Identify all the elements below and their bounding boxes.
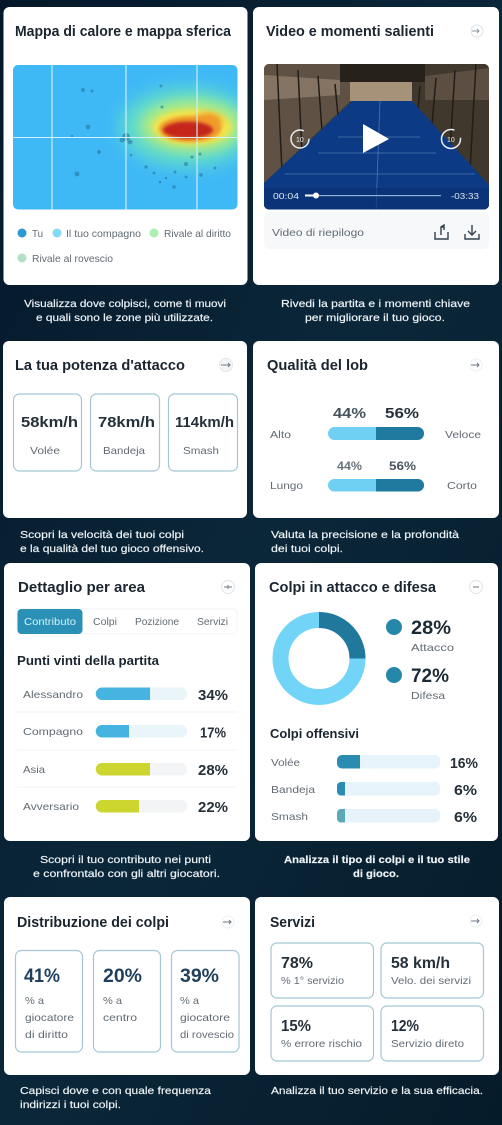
tabs: Servizi xyxy=(197,616,228,628)
heading: serves: Servizi xyxy=(270,914,315,931)
stat: backhand player: giocatore xyxy=(180,1012,230,1024)
stat: forehand player: % a xyxy=(25,995,44,1007)
caption: video: Rivedi la partita e i momenti chiave xyxy=(281,298,470,310)
stat: serve speed: 58 km/h xyxy=(391,955,450,972)
stat: backhand player: 39% xyxy=(180,966,219,987)
caption: serves: Analizza il tuo servizio e la sua efficacia. xyxy=(271,1085,483,1097)
row: bandeja xyxy=(271,782,477,799)
icon: attack arrow xyxy=(220,358,232,372)
panel: serves xyxy=(255,897,499,1075)
bar: alto / veloce: Veloce xyxy=(445,429,481,441)
stat: smash xyxy=(168,394,238,471)
caption: heat map: Visualizza dove colpisci, come ti muovi xyxy=(24,298,226,310)
heading: shot distribution: Distribuzione dei colpi xyxy=(17,914,169,931)
caption: area detail xyxy=(33,854,220,880)
stat: forehand player: giocatore xyxy=(25,1012,74,1024)
stat: serve speed: Velo. dei servizi xyxy=(391,975,471,987)
stat: risk error: 15% xyxy=(281,1018,311,1035)
legend: attack: 28% xyxy=(411,618,451,639)
stat: volée: Volée xyxy=(30,445,60,457)
caption: lob quality xyxy=(271,529,459,555)
heading: area detail: Dettaglio per area xyxy=(18,579,146,596)
icon: serves arrow xyxy=(470,915,482,927)
stat: serve speed xyxy=(381,943,484,998)
stat: backhand player xyxy=(172,950,239,1052)
caption: attack power xyxy=(20,529,204,555)
panel: heat map xyxy=(4,7,256,285)
row: volée xyxy=(271,755,478,772)
stat: direct serve xyxy=(381,1006,484,1061)
bar: lungo / corto: 44% xyxy=(337,459,362,473)
icon: forward xyxy=(442,130,460,148)
stat: first serve: 78% xyxy=(281,955,313,972)
caption: attack and defence: Analizza il tipo di colpi e il tuo stile xyxy=(284,854,470,866)
subheading: offensive shots: Colpi offensivi xyxy=(270,726,359,741)
stat: centre: % a xyxy=(103,995,122,1007)
legend: defence: Difesa xyxy=(411,690,445,702)
legend: defence: 72% xyxy=(411,666,449,687)
row: Alessandro: Alessandro xyxy=(23,689,83,701)
icon: play xyxy=(363,124,389,153)
stat: bandeja: Bandeja xyxy=(103,445,145,457)
legend: defence xyxy=(386,666,449,702)
row: bandeja: 6% xyxy=(454,782,477,799)
tabs xyxy=(17,609,237,634)
row: Avversario: Avversario xyxy=(23,801,79,813)
icon: attack defence arrow xyxy=(470,580,482,594)
heading: heat map: Mappa di calore e mappa sferica xyxy=(15,23,232,40)
caption: shot distribution xyxy=(20,1085,211,1111)
caption: attack power: e la qualità del tuo gioco offensivo. xyxy=(20,543,204,555)
row: Asia: Asia xyxy=(23,764,45,776)
stat: forehand player: 41% xyxy=(24,966,60,987)
tabs: Colpi xyxy=(93,616,117,628)
legend: heat map: Tu xyxy=(32,228,43,240)
icon: video arrow xyxy=(471,25,483,37)
legend: heat map xyxy=(18,228,231,265)
video player xyxy=(264,64,489,210)
caption: heat map: e quali sono le zone più utilizzate. xyxy=(36,312,213,324)
caption: lob quality: dei tuoi colpi. xyxy=(271,543,343,555)
bar: lungo / corto: 56% xyxy=(389,459,416,473)
icon: forward: 10 xyxy=(447,137,455,144)
bar: alto / veloce: 56% xyxy=(385,405,419,422)
caption: attack and defence xyxy=(284,854,470,880)
stat: bandeja xyxy=(90,394,160,471)
legend: heat map: Rivale al rovescio xyxy=(32,253,113,265)
row: Compagno xyxy=(23,724,226,742)
stat: first serve: % 1° servizio xyxy=(281,975,344,987)
icon: rewind: 10 xyxy=(296,137,304,144)
chart: heat map court xyxy=(13,65,256,210)
panel: attack and defence xyxy=(255,563,498,841)
icon: area arrow xyxy=(222,580,234,594)
stat: forehand player xyxy=(16,950,82,1052)
progress bar xyxy=(305,192,441,198)
row: volée: Volée xyxy=(271,757,300,769)
video footer: Video di riepilogo xyxy=(272,227,364,239)
stat: risk error xyxy=(271,1006,374,1061)
row: Avversario xyxy=(23,799,228,816)
row: Avversario: 22% xyxy=(198,799,228,816)
bar: lungo / corto: Corto xyxy=(447,480,477,492)
bar: alto / veloce xyxy=(270,405,481,441)
row: smash: 6% xyxy=(454,809,477,826)
caption: shot distribution: indirizzi i tuoi colpi. xyxy=(20,1099,121,1111)
subheading: points won: Punti vinti della partita xyxy=(17,653,160,668)
stat: bandeja: 78km/h xyxy=(98,414,155,431)
caption: shot distribution: Capisci dove e con quale frequenza xyxy=(20,1085,211,1097)
row: volée: 16% xyxy=(450,755,478,772)
tabs: Contributo xyxy=(24,617,76,628)
row: Alessandro: 34% xyxy=(198,687,228,704)
legend: heat map: Il tuo compagno xyxy=(66,228,141,240)
heading: video: Video e momenti salienti xyxy=(266,23,434,40)
stat: volée xyxy=(14,394,82,471)
stat: smash: Smash xyxy=(183,445,219,457)
stat: first serve xyxy=(271,943,374,998)
bar: lungo / corto xyxy=(270,459,477,492)
icon: rewind xyxy=(291,130,309,148)
stat: centre xyxy=(94,950,160,1052)
tabs: Pozizione xyxy=(135,616,179,628)
panel: area detail xyxy=(4,563,250,841)
caption: area detail: e confrontalo con gli altri giocatori. xyxy=(33,868,220,880)
stat: backhand player: di rovescio xyxy=(180,1029,234,1041)
stat: risk error: % errore rischio xyxy=(281,1038,362,1050)
icon: lob arrow xyxy=(470,359,482,371)
stat: centre: centro xyxy=(103,1012,137,1024)
row: smash xyxy=(271,809,477,826)
heading: attack and defence: Colpi in attacco e difesa xyxy=(269,579,437,596)
legend: attack: Attacco xyxy=(411,642,454,654)
icon: download xyxy=(465,225,479,239)
stat: direct serve: 12% xyxy=(391,1018,419,1035)
row: Asia: 28% xyxy=(198,762,228,779)
caption: lob quality: Valuta la precisione e la profondità xyxy=(271,529,459,541)
row: Compagno: 17% xyxy=(200,724,226,742)
row: Alessandro xyxy=(23,687,228,704)
video footer xyxy=(264,212,489,249)
caption: attack and defence: di gioco. xyxy=(353,868,399,880)
stat: centre: 20% xyxy=(103,966,142,987)
bar: lungo / corto: Lungo xyxy=(270,480,303,492)
stat: forehand player: di diritto xyxy=(25,1029,68,1041)
stat: volée: 58km/h xyxy=(21,414,78,431)
bar: alto / veloce: 44% xyxy=(333,405,366,422)
caption: video xyxy=(281,298,470,324)
caption: video: per migliorare il tuo gioco. xyxy=(305,312,445,324)
panel: video xyxy=(253,7,499,285)
stat: direct serve: Servizio direto xyxy=(391,1038,464,1050)
heading: attack power: La tua potenza d'attacco xyxy=(15,357,185,374)
stat: backhand player: % a xyxy=(180,995,199,1007)
row: bandeja: Bandeja xyxy=(271,784,315,796)
row: Compagno: Compagno xyxy=(23,726,83,738)
stat: smash: 114km/h xyxy=(175,414,234,431)
time left: -03:33 xyxy=(451,191,479,201)
caption: heat map xyxy=(24,298,226,324)
icon: share xyxy=(435,225,448,239)
donut chart xyxy=(280,620,358,697)
legend: heat map: Rivale al diritto xyxy=(164,228,231,240)
row: smash: Smash xyxy=(271,811,308,823)
bar: alto / veloce: Alto xyxy=(270,429,291,441)
panel: shot distribution xyxy=(4,897,250,1075)
icon: distribution arrow xyxy=(222,916,234,928)
heading: lob quality: Qualità del lob xyxy=(267,357,368,374)
caption: attack power: Scopri la velocità dei tuoi colpi xyxy=(20,529,184,541)
panel: attack power xyxy=(3,341,247,518)
panel: lob quality xyxy=(253,341,499,518)
row: Asia xyxy=(23,762,228,779)
legend: attack xyxy=(386,618,454,654)
caption: area detail: Scopri il tuo contributo nei punti xyxy=(40,854,211,866)
time elapsed: 00:04 xyxy=(273,191,299,201)
